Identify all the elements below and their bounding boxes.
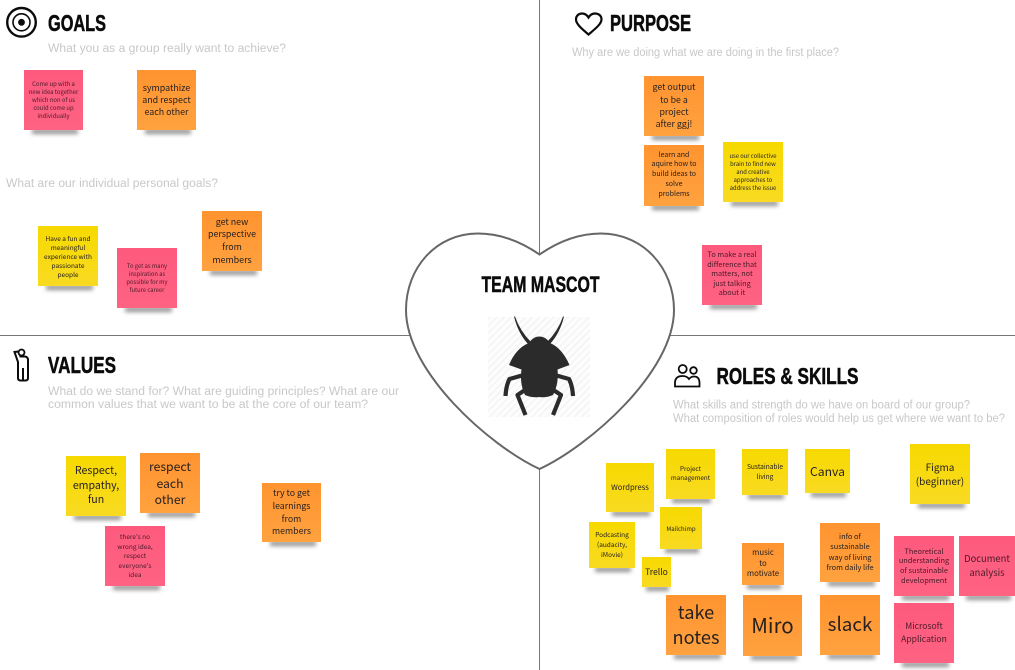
note: theoretical understanding: Theoretical xyxy=(904,546,944,557)
quadrant header: roles and skills: What composition of roles would help us get where we want to be? xyxy=(673,413,1005,425)
note: respect empathy fun: Respect, xyxy=(75,463,117,478)
note: respect empathy fun: empathy, xyxy=(73,478,119,493)
icon: heart xyxy=(576,14,602,34)
note: learnings xyxy=(262,483,321,542)
note: fun experience: people xyxy=(57,268,79,278)
note: sympathize xyxy=(137,70,196,130)
note: new idea: new idea together xyxy=(29,87,78,96)
note: take notes: notes xyxy=(673,624,719,650)
note: slack: slack xyxy=(828,610,872,637)
note: learnings: try to get xyxy=(273,486,310,499)
note: microsoft application: Microsoft xyxy=(905,620,943,632)
note: canva: Canva xyxy=(810,462,845,480)
quadrant header: roles and skills: ROLES & SKILLS xyxy=(716,363,858,389)
note: theoretical understanding: understanding xyxy=(899,555,949,566)
heart: team mascot outline xyxy=(406,234,674,469)
heading: team mascot: TEAM MASCOT xyxy=(482,272,600,297)
note: sustainable living xyxy=(742,449,788,495)
note: podcasting: (audacity, xyxy=(597,539,627,549)
quadrant header: goals: GOALS xyxy=(48,10,106,36)
note: theoretical understanding: development xyxy=(901,575,947,586)
note: new idea: individually xyxy=(37,111,70,120)
sticky notes: roles and skills xyxy=(589,444,1015,670)
note: figma: (beginner) xyxy=(916,473,964,488)
note: sustainable info: sustainable xyxy=(830,541,870,552)
note: respect each other: other xyxy=(155,490,185,508)
note: project management: Project xyxy=(680,464,701,473)
note: collective brain: and creative xyxy=(736,167,770,176)
note: microsoft application: Application xyxy=(901,633,947,645)
mascot image: beetle xyxy=(488,316,590,417)
note: project output: get output xyxy=(652,80,696,93)
note: document analysis xyxy=(959,536,1015,596)
note: mailchimp xyxy=(660,507,702,549)
icon: target xyxy=(7,8,36,37)
note: sympathize: and respect xyxy=(142,93,191,106)
note: theoretical understanding xyxy=(894,536,954,596)
note: mailchimp: Mailchimp xyxy=(666,524,696,532)
note: sustainable info: from daily life xyxy=(826,562,874,573)
note: music: motivate xyxy=(747,568,779,579)
note: project output xyxy=(644,76,704,136)
note: fun experience xyxy=(38,226,98,286)
note: figma xyxy=(910,444,970,504)
note: inspiration: To get as many xyxy=(127,261,167,270)
sticky notes: values xyxy=(66,453,321,593)
note: collective brain xyxy=(723,142,783,202)
note: figma: Figma xyxy=(926,459,954,474)
subheading: individual goals: What are our individual personal goals? xyxy=(6,178,218,190)
note: sustainable info: way of living xyxy=(829,552,871,562)
note: project output: project xyxy=(659,105,689,118)
note: miro xyxy=(743,595,802,656)
note: trello: Trello xyxy=(645,566,668,578)
note: canva xyxy=(805,449,850,493)
note: take notes xyxy=(666,595,726,655)
note: fun experience: Have a fun and xyxy=(45,232,91,242)
note: real difference: difference that xyxy=(707,260,757,270)
note: real difference xyxy=(702,245,762,305)
note: collective brain: address the issue xyxy=(730,183,776,192)
note: sustainable living: Sustainable xyxy=(747,461,783,471)
note: inspiration: future career xyxy=(130,285,164,294)
note: learn ideas: learn and xyxy=(659,150,689,160)
note: respect each other xyxy=(140,453,200,513)
note: music: music xyxy=(752,547,774,558)
note: fun experience: experience with xyxy=(44,250,92,260)
icon: two people xyxy=(675,365,700,386)
note: sympathize: each other xyxy=(144,105,188,118)
note: inspiration: possible for my xyxy=(126,277,168,286)
note: learnings: members xyxy=(272,524,311,537)
note: wordpress xyxy=(606,463,654,512)
note: new perspective: from xyxy=(222,240,242,253)
note: collective brain: brain to find new xyxy=(730,159,776,168)
note: collective brain: use our collective xyxy=(729,151,777,160)
note: new perspective: members xyxy=(212,253,252,266)
note: miro: Miro xyxy=(751,609,794,639)
note: music: to xyxy=(759,558,767,569)
note: new perspective: get new xyxy=(216,215,248,228)
note: project output: after ggj! xyxy=(656,117,692,130)
note: project management xyxy=(666,449,715,499)
note: learn ideas: problems xyxy=(658,189,690,199)
note: no wrong idea: wrong idea, xyxy=(117,541,153,551)
note: respect empathy fun xyxy=(66,456,126,516)
note: sympathize: sympathize xyxy=(143,81,190,94)
note: wordpress: Wordpress xyxy=(611,482,649,493)
note: real difference: matters, not xyxy=(711,269,753,279)
note: document analysis: Document xyxy=(964,551,1010,565)
note: project management: management xyxy=(671,473,710,482)
note: learn ideas: solve xyxy=(665,179,682,189)
note: inspiration: inspiration as xyxy=(129,269,165,278)
note: no wrong idea: there's no xyxy=(120,531,150,541)
quadrant header: goals: What you as a group really want to achieve? xyxy=(48,43,286,55)
note: new perspective xyxy=(202,211,262,271)
note: sustainable living: living xyxy=(757,471,773,481)
quadrant header: values: VALUES xyxy=(48,352,116,378)
sticky notes: goals xyxy=(24,70,262,315)
note: take notes: take xyxy=(678,599,714,625)
note: no wrong idea: respect xyxy=(124,550,146,560)
note: new idea: Come up with a xyxy=(32,79,75,88)
note: real difference: about it xyxy=(719,288,745,298)
icon: person with raised arm xyxy=(14,352,28,380)
note: real difference: just talking xyxy=(713,279,751,289)
note: learnings: learnings xyxy=(273,499,310,512)
note: fun experience: passionate xyxy=(52,260,84,270)
note: fun experience: meaningful xyxy=(51,242,85,252)
note: new idea: could come up xyxy=(33,103,74,112)
quadrant header: roles and skills: What skills and strength do we have on board of our group? xyxy=(673,400,970,412)
note: theoretical understanding: of sustainable xyxy=(900,565,948,576)
quadrant header: goals xyxy=(7,8,286,55)
quadrant header: values: What do we stand for? What are guiding principles? What are our xyxy=(48,386,399,398)
note: document analysis: analysis xyxy=(969,565,1005,579)
sticky notes: purpose xyxy=(644,76,783,312)
note: podcasting xyxy=(589,522,635,568)
note: learn ideas: build ideas to xyxy=(652,169,696,179)
note: no wrong idea: idea xyxy=(128,569,141,579)
note: new idea: which non of us xyxy=(32,95,75,104)
note: podcasting: iMovie) xyxy=(601,549,623,559)
note: sustainable info xyxy=(820,523,880,582)
note: new perspective: perspective xyxy=(208,227,256,240)
note: respect each other: respect xyxy=(149,457,191,475)
note: respect each other: each xyxy=(156,474,184,492)
quadrant header: purpose: Why are we doing what we are doing in the first place? xyxy=(572,47,839,59)
note: collective brain: approaches to xyxy=(734,175,772,184)
note: inspiration xyxy=(117,248,177,308)
note: respect empathy fun: fun xyxy=(88,492,104,507)
note: project output: to be a xyxy=(660,93,688,106)
note: trello xyxy=(642,557,671,587)
note: real difference: To make a real xyxy=(708,250,756,260)
note: no wrong idea xyxy=(105,526,165,586)
note: slack xyxy=(820,595,880,655)
note: no wrong idea: everyone's xyxy=(119,560,151,570)
quadrant header: values: common values that we want to be at the core of our team? xyxy=(48,399,368,411)
note: music xyxy=(742,543,784,585)
quadrant header: purpose: PURPOSE xyxy=(610,10,691,36)
note: learnings: from xyxy=(282,512,301,524)
note: learn ideas xyxy=(644,144,704,206)
note: sustainable info: info of xyxy=(839,531,861,542)
note: learn ideas: aquire how to xyxy=(652,159,696,169)
quadrant header: values xyxy=(14,350,399,411)
note: new idea xyxy=(24,70,83,130)
quadrant header: purpose xyxy=(572,10,839,59)
quadrant header: roles and skills xyxy=(673,363,1005,425)
note: podcasting: Podcasting xyxy=(595,529,629,539)
note: microsoft application xyxy=(894,603,954,663)
